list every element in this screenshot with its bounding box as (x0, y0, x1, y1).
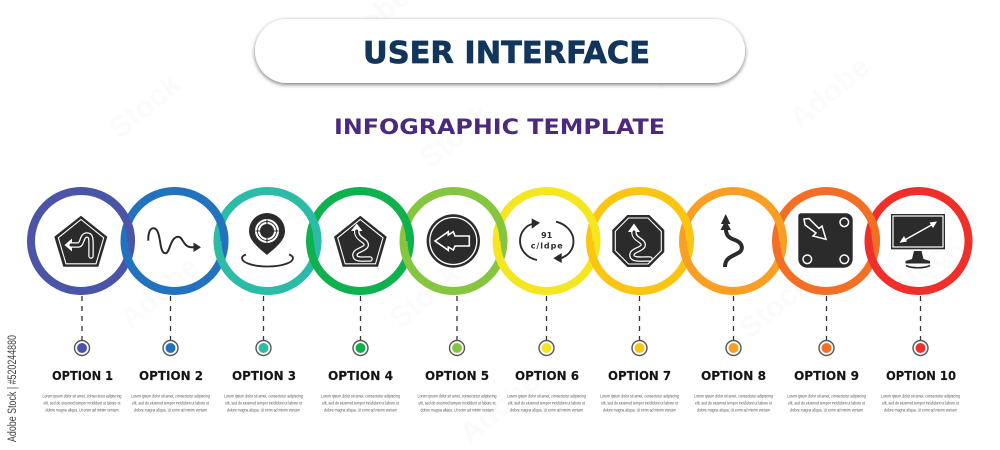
option 5: Lorem ipsum dolor sit amet, consectetur adipiscing (418, 394, 497, 398)
option 1: elit, sed do eiusmod tempor incididunt ut labore et (44, 400, 121, 406)
option 2: OPTION 2 (139, 368, 203, 383)
option 3: OPTION 3 (232, 368, 296, 383)
option 3: Lorem ipsum dolor sit amet, consectetur adipiscing (224, 394, 304, 398)
icon: cycle c/ldpe: c/ldpe (531, 242, 563, 250)
option 10 (881, 340, 961, 412)
watermark: Adobe (453, 365, 546, 450)
option 4: Lorem ipsum dolor sit amet, consectetur adipiscing (321, 394, 401, 398)
option 4: elit, sed do eiusmod tempor incididunt ut labore et (322, 400, 400, 406)
option 5: OPTION 5 (425, 368, 489, 383)
icon: left arrow circle (427, 214, 480, 268)
option 2 (131, 340, 211, 412)
option 6: elit, sed do eiusmod tempor incididunt ut labore et (508, 400, 586, 406)
icon: monitor (891, 214, 945, 268)
option 10: Lorem ipsum dolor sit amet, consectetur adipiscing (881, 394, 961, 398)
option 10: OPTION 10 (886, 368, 956, 383)
option 2: Lorem ipsum dolor sit amet, consectetur adipiscing (131, 394, 211, 398)
option 6: Lorem ipsum dolor sit amet, consectetur adipiscing (507, 394, 587, 398)
watermark: Stock (413, 97, 497, 175)
option 3: elit, sed do eiusmod tempor incididunt ut labore et (225, 400, 303, 406)
title pill (255, 19, 745, 83)
option 4: OPTION 4 (328, 368, 393, 383)
option 9: elit, sed do eiusmod tempor incididunt ut labore et (788, 400, 866, 406)
option 6: dolore magna aliqua. Ut enim ad minim veniam (510, 408, 583, 412)
option 7: Lorem ipsum dolor sit amet, consectetur adipiscing (600, 394, 680, 398)
option 1: OPTION 1 (52, 368, 113, 383)
option 1 (42, 340, 122, 412)
icon: winding up arrow (720, 214, 742, 267)
option 9 (787, 340, 867, 412)
option 9: Lorem ipsum dolor sit amet, consectetur adipiscing (787, 394, 867, 398)
icon: winding arrow (148, 228, 201, 253)
option rings (31, 191, 968, 291)
watermark: Adobe (643, 10, 736, 95)
option 3 (224, 340, 304, 412)
option 5 (418, 340, 497, 412)
option 6 (507, 340, 587, 412)
stock id label: Adobe Stock | #520244880 (7, 335, 19, 442)
icon: cycle c/ldpe: 91 (541, 231, 553, 240)
option 8: dolore magna aliqua. Ut enim ad minim veniam (697, 408, 770, 412)
option 7: OPTION 7 (608, 368, 671, 383)
option 7: elit, sed do eiusmod tempor incididunt ut labore et (601, 400, 679, 406)
icon: plate with arrow (798, 213, 853, 268)
option 8 (694, 340, 774, 412)
option 6: OPTION 6 (515, 368, 579, 383)
option 5: elit, sed do eiusmod tempor incididunt ut labore et (418, 400, 496, 406)
subtitle: INFOGRAPHIC TEMPLATE (334, 115, 665, 139)
connector lines (82, 296, 920, 340)
option 4: dolore magna aliqua. Ut enim ad minim veniam (324, 408, 397, 412)
option 2: elit, sed do eiusmod tempor incididunt ut labore et (132, 400, 210, 406)
option 9: dolore magna aliqua. Ut enim ad minim veniam (790, 408, 863, 412)
watermark: Stock (883, 227, 967, 305)
watermark: Stock (103, 67, 187, 145)
option 10: elit, sed do eiusmod tempor incididunt ut labore et (882, 400, 960, 406)
icon: location pin (242, 213, 293, 266)
icon: octagon road sign (612, 215, 664, 267)
option 10: dolore magna aliqua. Ut enim ad minim veniam (884, 408, 957, 412)
option 7 (600, 340, 680, 412)
option 7: dolore magna aliqua. Ut enim ad minim veniam (603, 408, 676, 412)
title: USER INTERFACE (363, 36, 650, 71)
option 8: elit, sed do eiusmod tempor incididunt ut labore et (695, 400, 773, 406)
option 2: dolore magna aliqua. Ut enim ad minim veniam (134, 408, 207, 412)
option 1: dolore magna aliqua. Ut enim ad minim veniam (46, 408, 119, 412)
option 3: dolore magna aliqua. Ut enim ad minim veniam (227, 408, 300, 412)
icon: pentagon road sign 4 (334, 216, 387, 267)
icon: pentagon road sign 1 (54, 216, 107, 267)
option 5: dolore magna aliqua. Ut enim ad minim veniam (420, 408, 494, 412)
option 4 (321, 340, 401, 412)
watermark: Adobe (783, 50, 876, 135)
option 8: OPTION 8 (701, 368, 766, 383)
option 9: OPTION 9 (794, 368, 859, 383)
watermark: Adobe (113, 250, 206, 335)
watermark: Stock (733, 267, 817, 345)
option 8: Lorem ipsum dolor sit amet, consectetur adipiscing (694, 394, 774, 398)
icon: cycle c/ldpe (520, 218, 574, 263)
option 1: Lorem ipsum dolor sit amet, consectetur adipiscing (42, 394, 122, 398)
watermark: Stock (383, 257, 467, 335)
